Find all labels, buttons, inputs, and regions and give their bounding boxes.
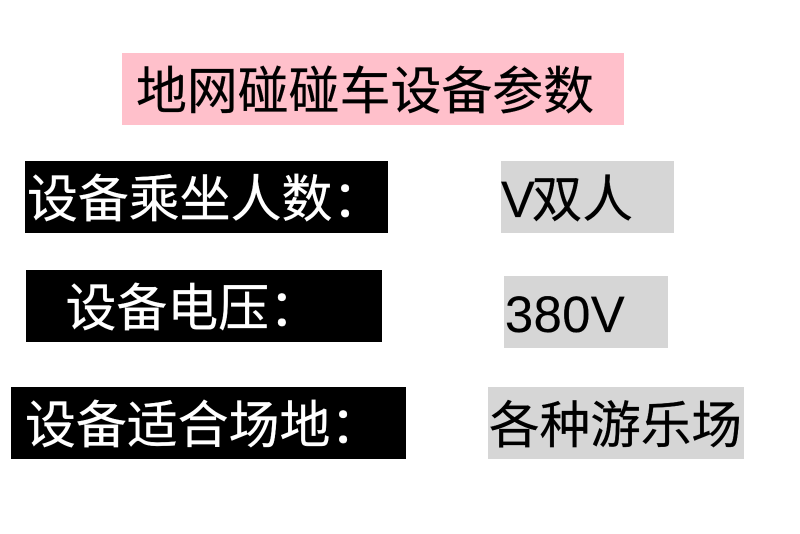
label: voltage <box>26 270 382 342</box>
value: passengers <box>501 161 674 233</box>
label: voltage: 设备电压： <box>66 280 320 337</box>
label: passengers: 设备乘坐人数： <box>27 171 383 228</box>
value: voltage: 380V <box>505 286 625 343</box>
value: passengers: V双人 <box>501 171 633 228</box>
value: voltage <box>504 276 668 348</box>
value: venue: 各种游乐场 <box>489 397 742 454</box>
label: venue: 设备适合场地： <box>25 397 381 454</box>
title: 地网碰碰车设备参数 <box>136 63 594 120</box>
